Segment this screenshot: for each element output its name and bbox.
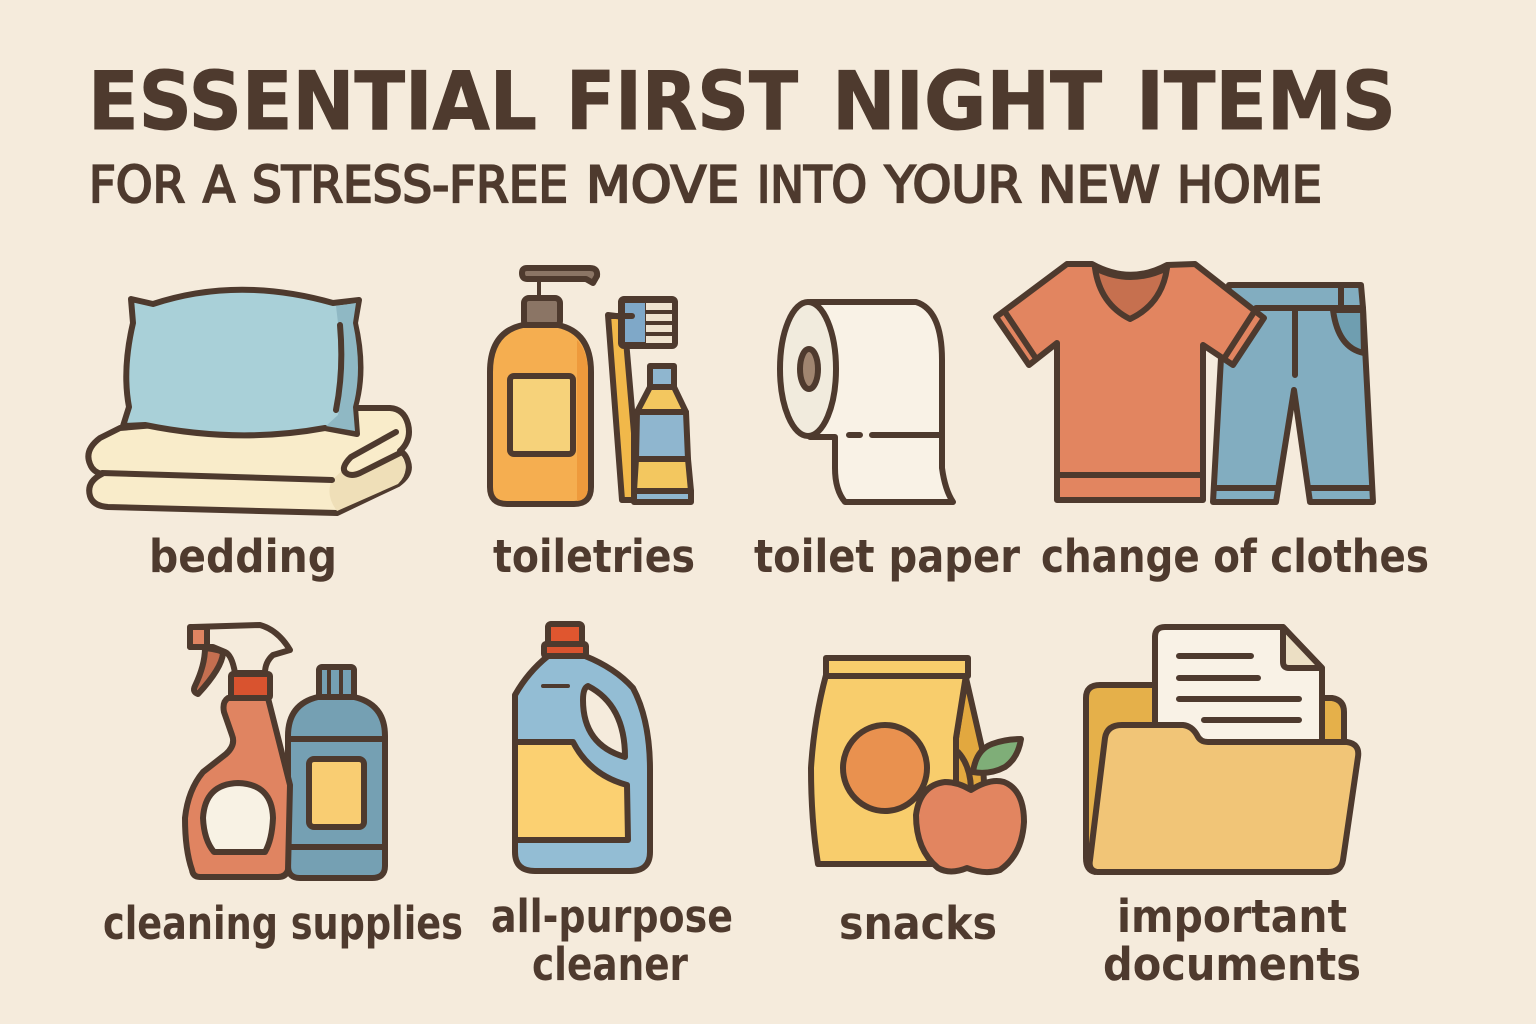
- subtitle: FOR: [89, 156, 185, 214]
- label: toiletries: toiletries: [493, 530, 695, 583]
- icon: toiletries: [490, 268, 691, 504]
- title: FIRST: [566, 55, 798, 148]
- subtitle: INTO: [757, 156, 867, 214]
- title: ITEMS: [1136, 55, 1396, 148]
- subtitle: YOUR: [884, 156, 1022, 214]
- label: cleaning supplies: cleaning supplies: [103, 897, 463, 950]
- subtitle: HOME: [1177, 156, 1322, 214]
- icon: change of clothes: [996, 264, 1373, 502]
- subtitle: A: [203, 156, 235, 214]
- label: change of clothes: change of clothes: [1041, 530, 1429, 583]
- label: important documents: [1103, 890, 1361, 991]
- icon: snacks: [811, 658, 1024, 872]
- label: toilet paper: toilet paper: [754, 530, 1021, 583]
- subtitle: [89, 156, 1322, 214]
- label: bedding: bedding: [149, 530, 337, 583]
- label: snacks: snacks: [839, 897, 997, 950]
- label: all-purpose cleaner: all-purpose: [491, 890, 733, 943]
- label: all-purpose cleaner: cleaner: [532, 938, 689, 991]
- title: [88, 55, 1396, 148]
- icon: important documents: [1086, 627, 1358, 872]
- icon: cleaning supplies: [185, 625, 385, 878]
- title: NIGHT: [832, 55, 1102, 148]
- label: important documents: important: [1117, 890, 1347, 943]
- subtitle: MOVE: [586, 156, 739, 214]
- label: all-purpose cleaner: [491, 890, 733, 991]
- icon: all-purpose cleaner: [515, 624, 650, 871]
- icon: bedding: [88, 290, 409, 513]
- title: ESSENTIAL: [88, 55, 537, 148]
- label: important documents: documents: [1103, 938, 1361, 991]
- subtitle: NEW: [1038, 156, 1160, 214]
- icon: toilet paper: [780, 302, 953, 502]
- subtitle: STRESS-FREE: [252, 156, 568, 214]
